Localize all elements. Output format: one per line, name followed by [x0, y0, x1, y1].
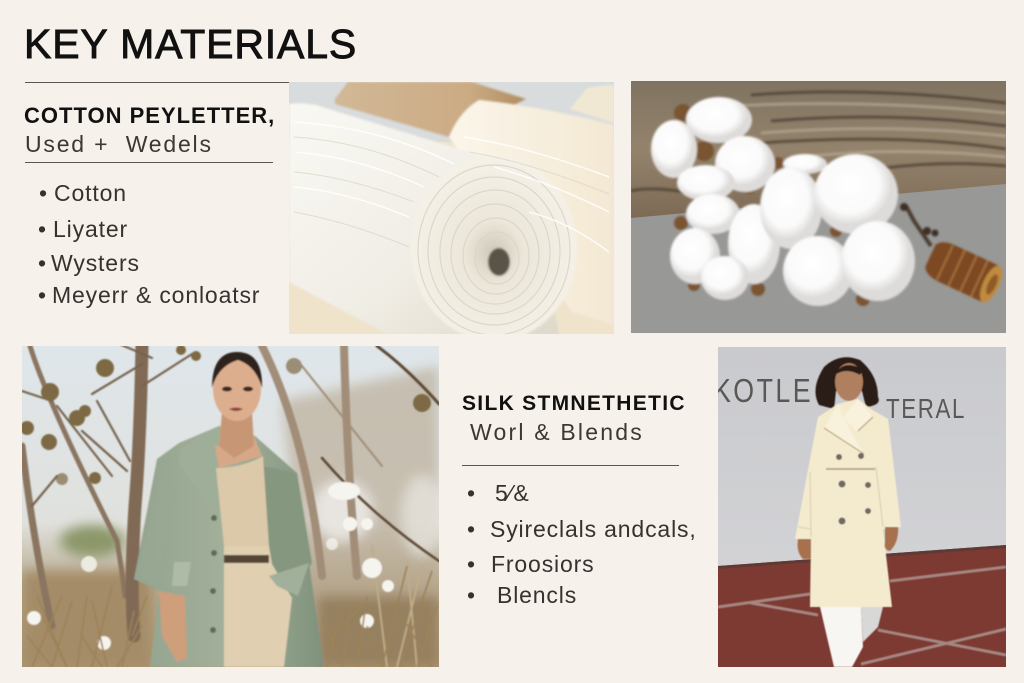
cotton subheading: Used + Wedels — [25, 131, 213, 157]
text block: silk — [462, 392, 686, 445]
photo: cotton yarn rolls — [289, 82, 614, 334]
silk list — [467, 480, 697, 608]
wall lettering — [713, 372, 966, 424]
cotton list — [38, 180, 260, 308]
silk subheading: Worl & Blends — [470, 419, 644, 445]
cotton list: • — [38, 282, 46, 308]
cotton list: • — [38, 250, 46, 276]
cotton list: Meyerr & conloatsr — [52, 282, 260, 308]
text block: cotton — [24, 103, 275, 157]
silk list: • — [467, 516, 475, 542]
cotton heading: COTTON PEYLETTER, — [24, 103, 275, 128]
cotton list: Cotton — [54, 180, 127, 206]
silk list: • — [467, 480, 475, 506]
wall lettering: TERAL — [886, 393, 966, 424]
figure: coat — [134, 352, 324, 667]
photo: model in cream trench coat — [718, 347, 1006, 667]
photo: model in green coat among cotton plants — [22, 346, 439, 667]
grasses — [27, 566, 437, 667]
silk heading: SILK STMNETHETIC — [462, 392, 686, 415]
photo: cotton bolls on wood — [631, 81, 1006, 333]
cotton list: • — [38, 216, 46, 242]
silk list: 5⁄& — [495, 480, 530, 506]
silk list: Blencls — [497, 582, 577, 608]
silk list: • — [467, 582, 475, 608]
silk list: • — [467, 551, 475, 577]
silk list: Syireclals andcals, — [490, 516, 697, 542]
silk list: Froosiors — [491, 551, 595, 577]
cotton list: • — [39, 180, 47, 206]
cotton list: Wysters — [51, 250, 140, 276]
cotton list: Liyater — [53, 216, 128, 242]
title: KEY MATERIALS — [24, 21, 357, 67]
